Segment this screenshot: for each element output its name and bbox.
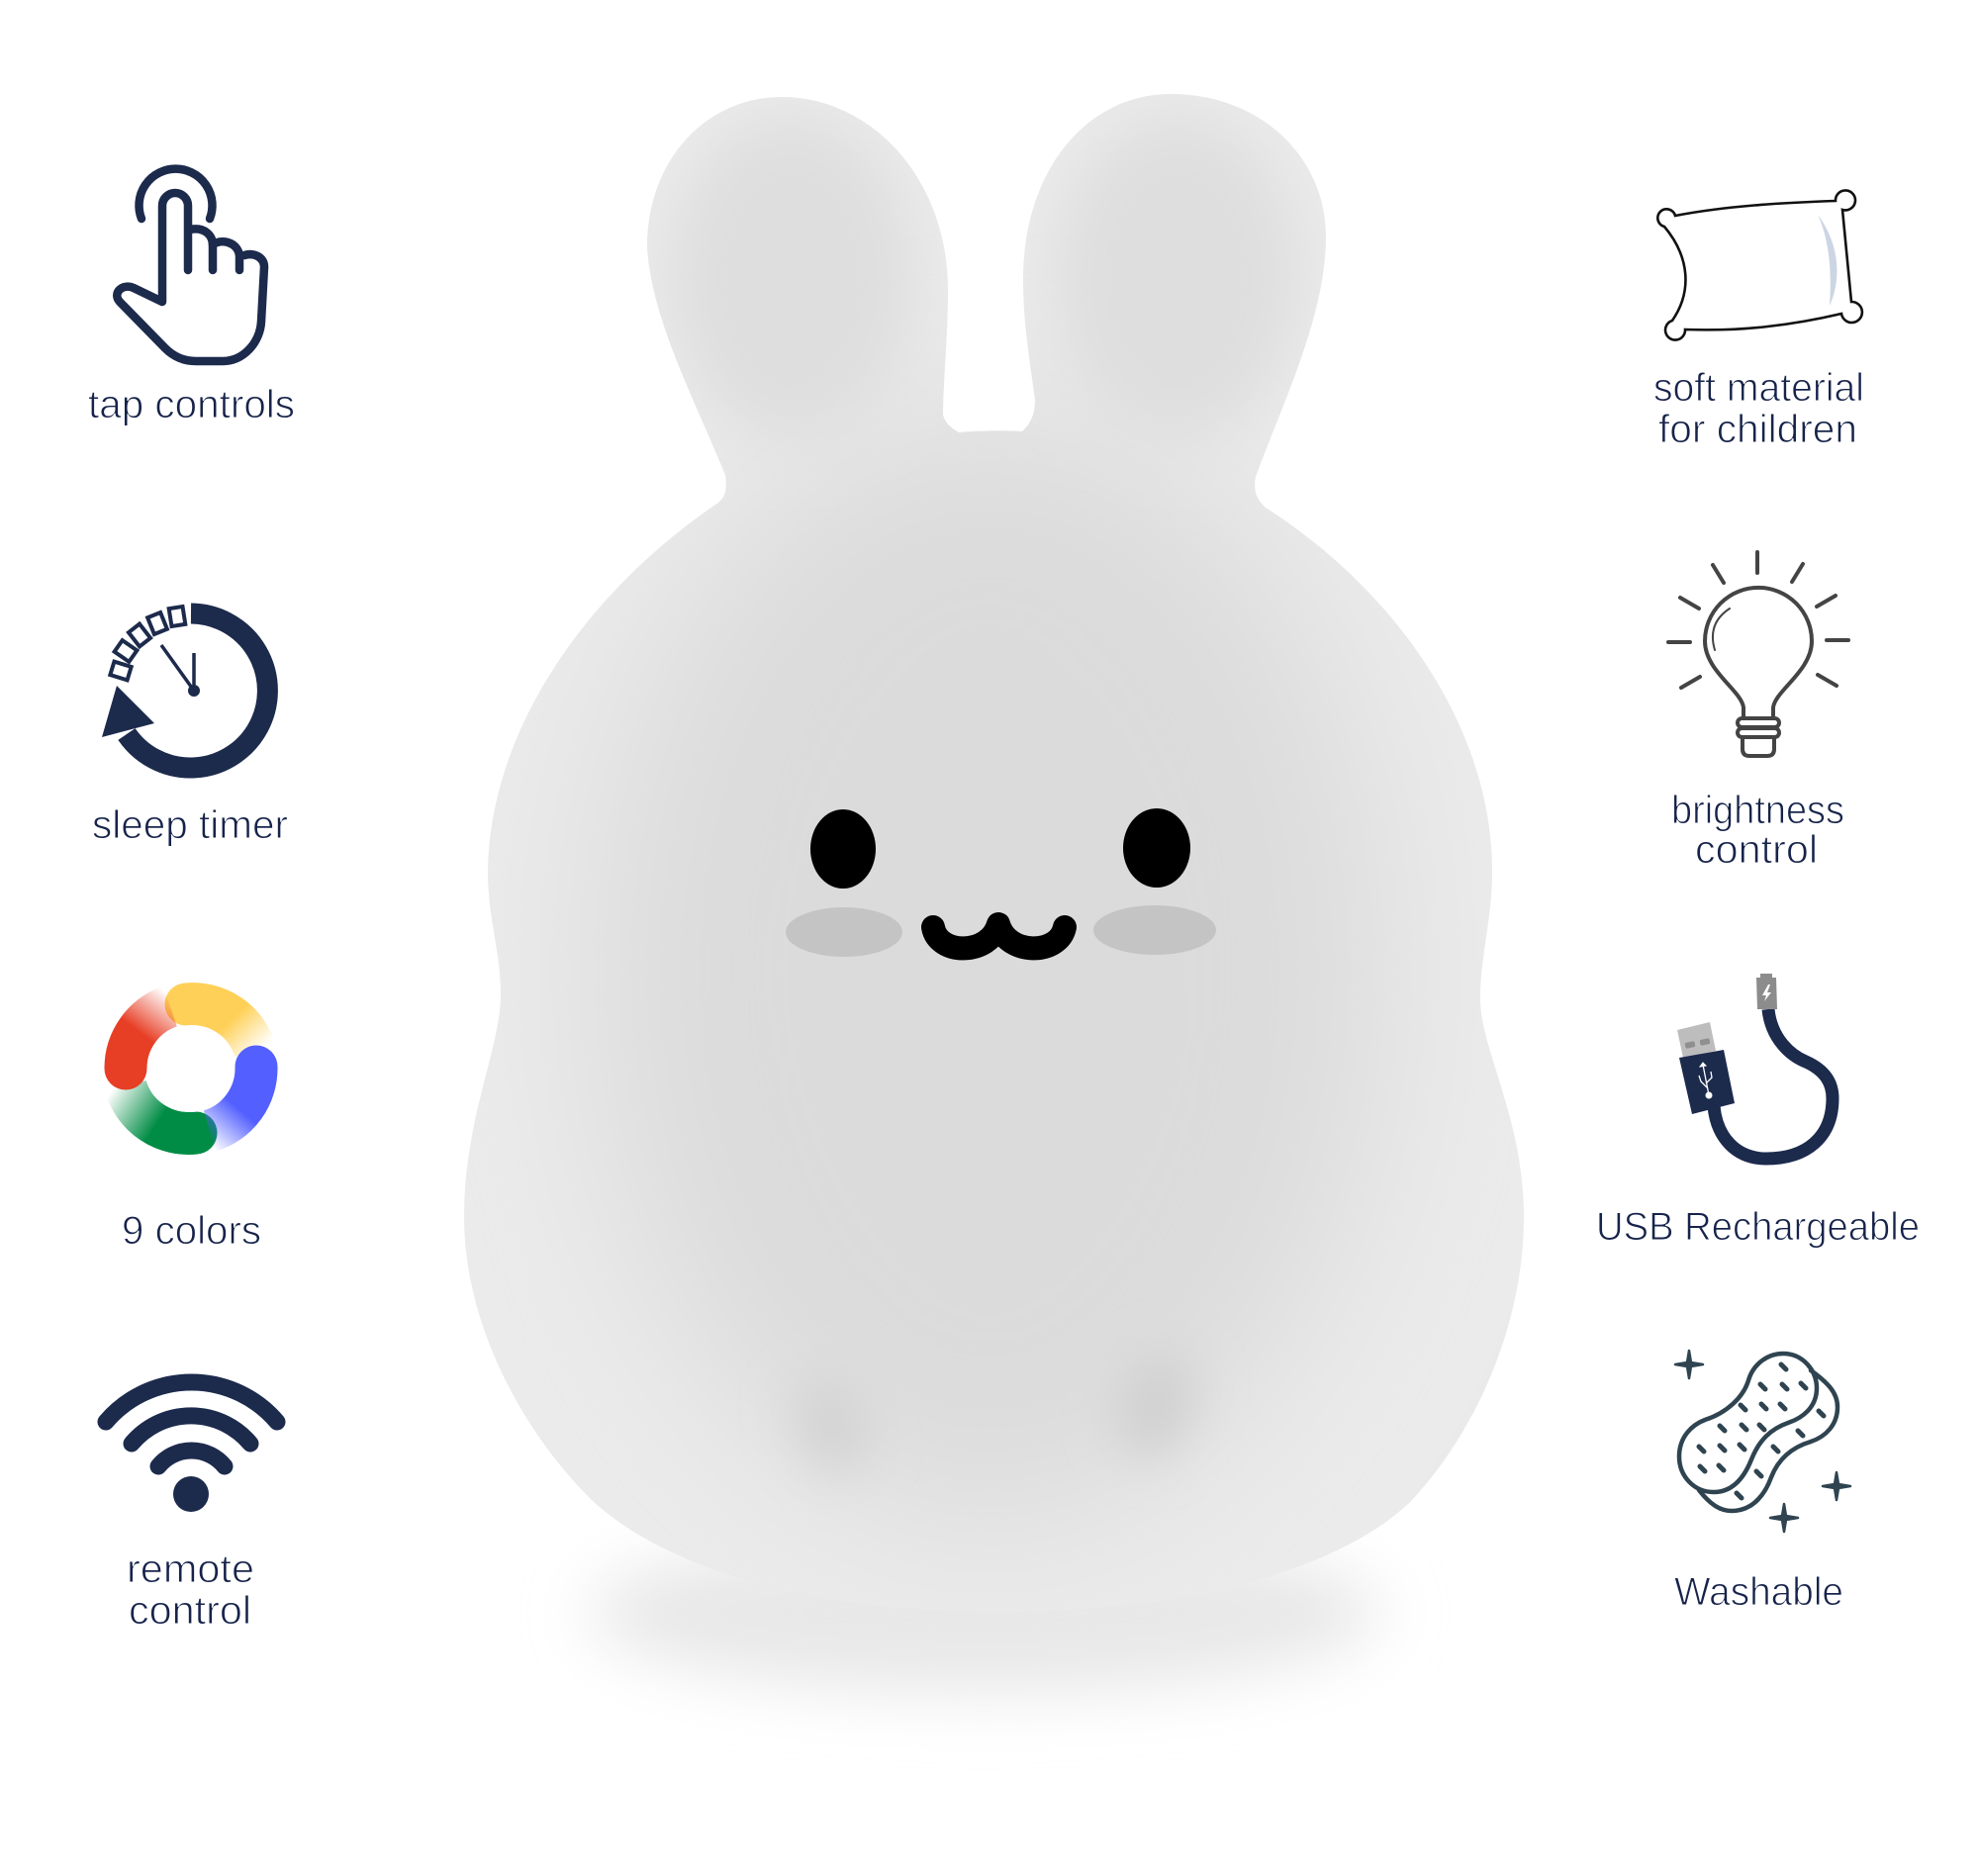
feature: soft material — [1653, 190, 1864, 451]
feature: brightness control: control — [1695, 828, 1818, 872]
feature: tap controls — [88, 169, 295, 426]
label: tap controls: tap controls — [88, 383, 295, 426]
mouth — [933, 924, 1065, 948]
label: USB Rechargeable: USB Rechargeable — [1596, 1205, 1920, 1249]
right cheek — [1093, 905, 1216, 955]
feature: sleep timer — [92, 607, 288, 847]
bunny body — [435, 79, 1544, 1642]
feature: brightness control — [1668, 552, 1848, 872]
label: 9 colors: 9 colors — [122, 1209, 261, 1253]
feature: washable — [1674, 1351, 1850, 1614]
left cheek — [786, 907, 902, 957]
right eye — [1123, 808, 1190, 888]
icon: light bulb — [1668, 552, 1848, 756]
label: brightness control: brightness — [1671, 789, 1844, 832]
label: Washable: Washable — [1674, 1570, 1843, 1614]
feature: remote control — [106, 1382, 277, 1633]
bunny lamp — [435, 79, 1544, 1642]
left eye — [810, 809, 876, 889]
feature: soft material: for children — [1658, 408, 1857, 451]
icon: clock with arrow — [102, 607, 267, 768]
icon: tapping hand — [117, 169, 264, 361]
icon: colour ring — [105, 984, 277, 1154]
feature: remote control: control — [129, 1589, 251, 1633]
feature: USB rechargeable — [1596, 974, 1920, 1249]
icon: wireless signal — [106, 1382, 277, 1512]
label: soft material for children: soft material — [1653, 366, 1864, 410]
feature: 9 colors — [105, 984, 277, 1253]
floor shadow — [589, 1532, 1380, 1694]
icon: sponge with sparkles — [1675, 1351, 1850, 1532]
icon: pillow — [1657, 190, 1862, 340]
icon: USB cable — [1677, 974, 1833, 1159]
label: remote control: remote — [127, 1548, 254, 1591]
label: sleep timer: sleep timer — [92, 803, 288, 847]
